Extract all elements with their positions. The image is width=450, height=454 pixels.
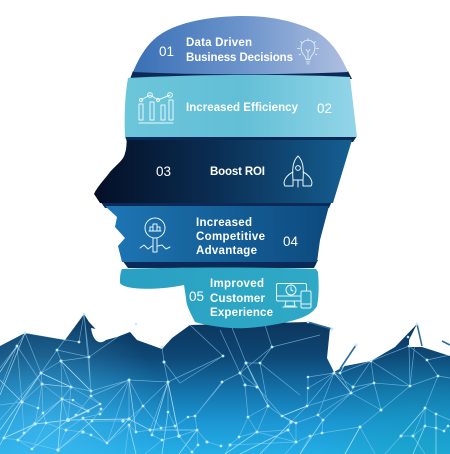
band 4 number: 04 bbox=[283, 234, 299, 249]
icon: bar and line chart bbox=[139, 93, 173, 123]
band 2 label: Increased Efficiency bbox=[186, 102, 299, 114]
network right teal tint bbox=[348, 417, 450, 454]
band 1 label: Data Driven bbox=[186, 37, 252, 49]
band 4 label: Advantage bbox=[196, 245, 257, 257]
band 4 shape bbox=[105, 206, 329, 262]
dark spike strokes on skyline bbox=[308, 322, 450, 369]
band 5 label: Improved bbox=[210, 278, 264, 290]
icon: light bulb bbox=[297, 39, 319, 64]
band 3 number: 03 bbox=[156, 164, 171, 179]
band 3 label: Boost ROI bbox=[210, 166, 265, 178]
network lines bbox=[0, 310, 450, 454]
icon: computer and phone bbox=[276, 284, 311, 308]
icon: magnifier with bars bbox=[140, 218, 170, 252]
white gap in silhouette bbox=[91, 328, 106, 342]
band 4 label: Competitive bbox=[196, 231, 265, 243]
band 5 label: Customer bbox=[210, 293, 266, 305]
band 1 label: Business Decisions bbox=[186, 52, 293, 64]
band 4: increased competitive advantage bbox=[105, 206, 329, 262]
band 5 label: Experience bbox=[210, 307, 273, 319]
network left glow bbox=[0, 322, 139, 454]
band 4 label: Increased bbox=[196, 217, 252, 229]
dark separator bars bbox=[100, 71, 357, 268]
band 5 number: 05 bbox=[189, 289, 204, 304]
network landscape base bbox=[0, 300, 450, 454]
band 2: increased efficiency bbox=[125, 75, 357, 137]
network nodes bbox=[2, 313, 449, 453]
network bright lines bbox=[0, 333, 436, 454]
band 1 shape bbox=[133, 16, 348, 74]
band 5: improved customer experience bbox=[120, 268, 319, 328]
band 5 shape bbox=[120, 268, 319, 328]
network silhouette background bbox=[0, 310, 450, 454]
head bbox=[94, 16, 357, 328]
band 1 number: 01 bbox=[159, 44, 174, 59]
icon: rocket bbox=[284, 156, 312, 187]
band 3 shape bbox=[94, 140, 352, 203]
band 2 number: 02 bbox=[317, 101, 332, 116]
band 1: data driven business decisions bbox=[133, 16, 348, 74]
band 3: boost ROI bbox=[94, 140, 352, 203]
band 2 shape bbox=[125, 75, 357, 137]
